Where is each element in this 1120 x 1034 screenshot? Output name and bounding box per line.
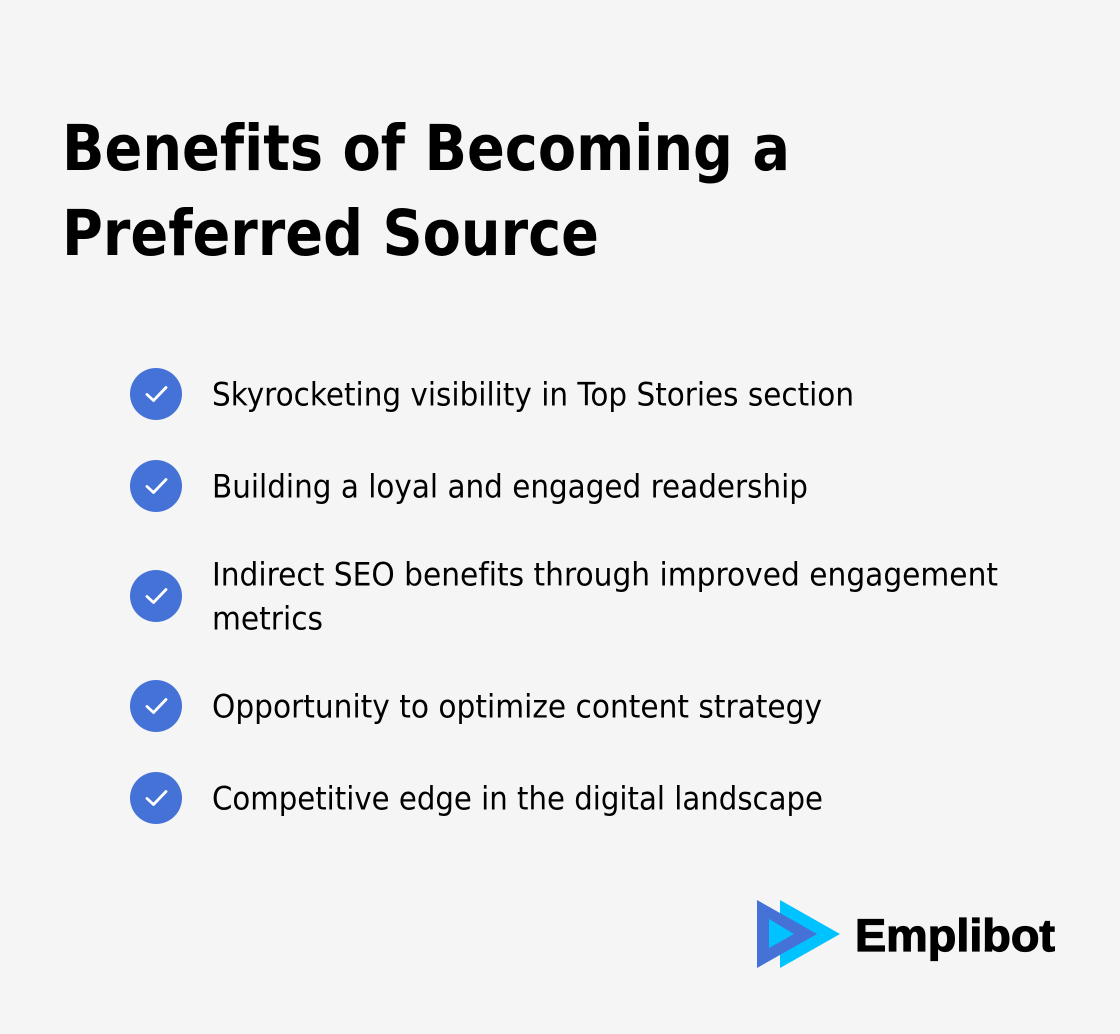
text: item 3: Indirect SEO benefits through improved engagement (212, 556, 998, 594)
list item 1 (130, 368, 854, 420)
list item 5 (130, 772, 823, 824)
icon: check 5 (130, 772, 182, 824)
list item 4 (130, 680, 822, 732)
text: item 2: Building a loyal and engaged readership (212, 468, 808, 506)
list item 3 (130, 556, 998, 638)
title: Preferred Source (62, 197, 599, 270)
icon: check 3 (130, 570, 182, 622)
list item 2 (130, 460, 808, 512)
text: item 3: metrics (212, 600, 323, 638)
text: item 1: Skyrocketing visibility in Top Stories section (212, 376, 854, 414)
wordmark: Emplibot (855, 910, 1055, 961)
icon: check 2 (130, 460, 182, 512)
icon: check 4 (130, 680, 182, 732)
title: Benefits of Becoming a (62, 112, 790, 185)
text: item 5: Competitive edge in the digital landscape (212, 780, 823, 818)
title (62, 112, 790, 270)
logo: Emplibot (757, 900, 1055, 968)
icon: check 1 (130, 368, 182, 420)
text: item 4: Opportunity to optimize content strategy (212, 688, 822, 726)
icon: logo triangles (757, 900, 840, 968)
benefits list (130, 368, 998, 824)
text: item 3 (212, 556, 998, 638)
